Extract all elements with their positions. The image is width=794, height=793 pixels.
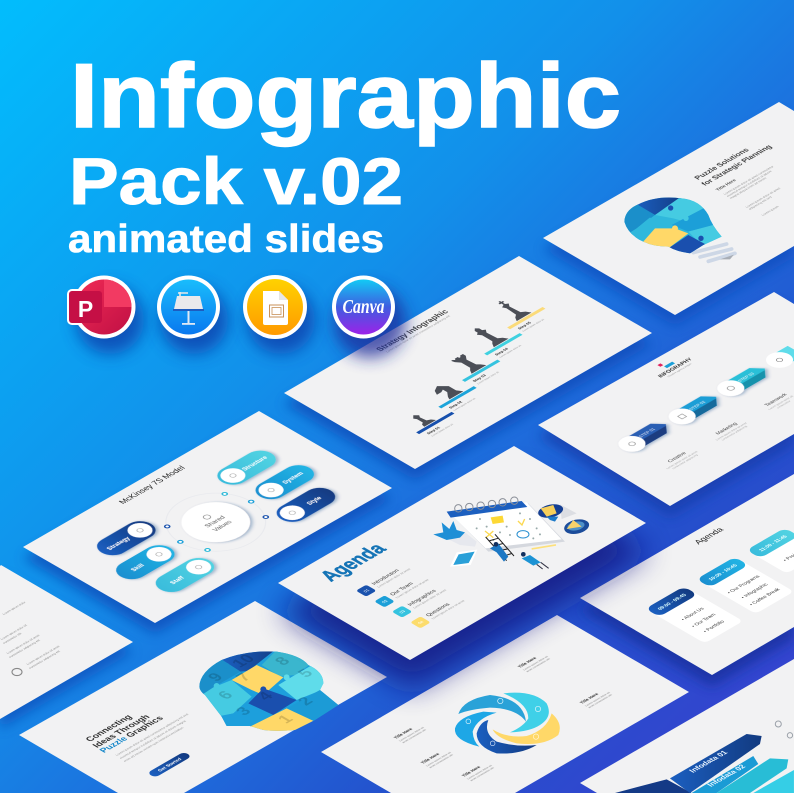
- body text: Lorem ipsum dolor sit amet consectetur adipiscing elit sed: [114, 713, 190, 757]
- pill: strategy: [91, 517, 162, 559]
- subheading and body: [715, 165, 782, 217]
- step 5 with king: Lorem ipsum dolor sit: [521, 318, 545, 332]
- caption: bottom: [461, 761, 496, 782]
- pill: system: System: [282, 472, 306, 485]
- step 3 with rook: Lorem ipsum dolor sit: [476, 371, 500, 385]
- column 1: • Portfolio: [702, 620, 726, 634]
- caption: teamwork: [762, 392, 794, 412]
- heading: connecting ideas: Connecting: [83, 713, 134, 743]
- agenda item 4: 04: [416, 620, 425, 625]
- step 1 with pawn: [400, 402, 464, 440]
- step 5 with king: [481, 292, 555, 335]
- swirl chart: [455, 693, 560, 754]
- icon: Canva: Canva: [342, 296, 384, 318]
- pill: skill: [110, 541, 181, 583]
- icon: Canva: [332, 276, 406, 358]
- caption: bottom: Lorem ipsum dolor sit: [466, 764, 493, 780]
- agenda item 4: Questions: [425, 602, 452, 618]
- puzzle numbers: 5: [294, 666, 317, 680]
- caption: marketing: Marketing: [715, 422, 739, 436]
- puzzle numbers: [204, 652, 317, 726]
- column 1: • About Us: [680, 606, 706, 622]
- step 1 with pawn: Lorem ipsum dolor sit: [430, 423, 455, 437]
- step 2: STEP 02: [688, 400, 707, 411]
- icon: PowerPoint: [67, 276, 144, 354]
- caption: left: [393, 723, 428, 744]
- icon: Google Slides: [243, 275, 315, 354]
- step 4: [760, 345, 794, 371]
- column 1: • Our Team: [690, 613, 718, 629]
- slide: left partial list: [0, 565, 133, 729]
- agenda item 1: [356, 564, 412, 597]
- slide: puzzle light bulb: [543, 102, 794, 326]
- subheading: Lorem ipsum dolor sit amet consectetur adipiscing elit: [385, 315, 451, 353]
- list text rows: consectetur adipiscing elit: [27, 650, 61, 670]
- step 2: [663, 391, 726, 428]
- column 2: • Coffee Break: [748, 587, 782, 607]
- list text rows: [0, 601, 61, 670]
- tagline: animated slides: animated slides: [68, 218, 384, 261]
- agenda item 1: Introduction: [371, 569, 401, 586]
- caption: lower left: [420, 748, 455, 769]
- slide: head puzzle: [19, 601, 387, 793]
- caption: bottom: amet consectetur elit: [469, 766, 495, 782]
- step 3: [712, 363, 774, 399]
- column 2: • Infographic: [740, 582, 770, 600]
- subtitle: Pack v.02: Pack v.02: [69, 144, 403, 218]
- step 3: STEP 03: [736, 371, 756, 383]
- center: shared values: Values: [211, 520, 234, 533]
- body text: enim ad minim veniam quis nostrud exercitation: [122, 726, 185, 763]
- pill: staff: Staff: [170, 576, 186, 586]
- pill: staff: [149, 554, 221, 596]
- ring connector dots: [157, 488, 275, 556]
- step 4 with queen: Lorem ipsum dolor sit: [498, 344, 523, 358]
- step 4 with queen: Step 04: [494, 347, 510, 356]
- list text rows: Lorem ipsum dolor sit amet: [25, 645, 61, 666]
- caption: left: amet consectetur elit: [401, 728, 427, 744]
- subheading and body: Lorem ipsum dolor sit amet: [744, 187, 782, 209]
- logo: [648, 352, 697, 380]
- illustration: calendar with people: [433, 497, 590, 569]
- puzzle numbers: 3: [232, 704, 255, 718]
- caption: teamwork: consectetur: [775, 400, 792, 409]
- caption: marketing: consectetur adipiscing: [720, 425, 749, 441]
- caption: creative: consectetur adipiscing: [671, 453, 699, 470]
- column 3: 11:00 - 11:45: [758, 534, 789, 553]
- step 2 with knight: Lorem ipsum dolor sit: [452, 397, 477, 411]
- puzzle numbers: 10: [228, 652, 259, 670]
- list text rows: consectetur elit: [1, 632, 23, 645]
- heading: agenda: Agenda: [315, 540, 391, 585]
- agenda item 2: Our Team: [389, 581, 416, 597]
- agenda item 2: Lorem ipsum dolor sit amet: [394, 578, 430, 599]
- list text rows: Lorem ipsum dolor: [1, 601, 27, 616]
- agenda item 2: [374, 575, 430, 607]
- list text rows: Lorem ipsum dolor sit: [0, 624, 28, 641]
- agenda item 2: 02: [380, 599, 389, 604]
- step 5 with king: Step 05: [517, 321, 533, 330]
- pill: style: Style: [306, 496, 324, 506]
- pill: system: [249, 461, 320, 503]
- puzzle numbers: 7: [232, 670, 255, 684]
- list text rows: consectetur adipiscing elit: [7, 639, 41, 659]
- step 1 with pawn: Step 01: [426, 426, 442, 435]
- arrow label: Infodata 01: Infodata 01: [687, 749, 730, 774]
- step 4 with queen: [458, 318, 532, 361]
- heading: connecting ideas: Ideas Through: [90, 713, 152, 749]
- subheading and body: Lorem ipsum: [760, 205, 780, 217]
- column 3: [746, 528, 794, 574]
- caption: top: Title Here: [517, 656, 538, 669]
- caption: right: amet consectetur elit: [587, 693, 613, 709]
- caption: teamwork: Lorem ipsum dolor sit: [767, 395, 794, 411]
- button: get started: Get Started: [157, 757, 183, 772]
- agenda item 4: Lorem ipsum dolor sit amet: [430, 599, 466, 620]
- puzzle numbers: 8: [271, 654, 294, 668]
- heading: Strategy Infographic: [374, 308, 451, 353]
- caption: creative: Lorem ipsum dolor sit amet: [665, 450, 699, 470]
- logo: Creative agency slogan: [666, 362, 693, 378]
- puzzle numbers: 1: [274, 712, 297, 726]
- caption: top: amet consectetur elit: [525, 657, 551, 673]
- heading: agenda: Agenda: [692, 526, 726, 546]
- center: shared values: [167, 494, 264, 550]
- pill: structure: [211, 447, 282, 488]
- step 2 with knight: [420, 375, 486, 414]
- puzzle numbers: 6: [214, 688, 237, 702]
- puzzle numbers: 9: [204, 670, 227, 684]
- caption: bottom: Title Here: [461, 765, 482, 778]
- heading: McKinsey 7S Model: [117, 464, 187, 505]
- caption: marketing: Lorem ipsum dolor sit amet: [714, 422, 748, 441]
- icon: Keynote: [157, 276, 228, 354]
- agenda item 4: [410, 596, 466, 628]
- list text rows: Lorem ipsum dolor sit amet: [5, 634, 41, 655]
- agenda item 3: [392, 585, 448, 618]
- caption: creative: [660, 447, 702, 471]
- pill: strategy: Strategy: [106, 536, 133, 551]
- subheading and body: eiusmod tempor incididunt ut labore: [725, 170, 773, 198]
- agenda item 3: Infographics: [407, 589, 438, 607]
- head puzzle graphic: [199, 651, 338, 731]
- body text: eiusmod tempor incididunt ut labore et dolore magna: [118, 720, 187, 760]
- caption: lower left: amet consectetur elit: [428, 753, 454, 769]
- puzzle numbers: 4: [254, 689, 277, 703]
- title: Infographic: Infographic: [70, 46, 621, 147]
- icon: PowerPoint: P: [78, 296, 93, 322]
- puzzle numbers: 2: [294, 694, 317, 708]
- step 1: STEP 01: [637, 427, 657, 438]
- slide: swirl diagram: [321, 615, 689, 793]
- pill: structure: Structure: [242, 455, 270, 472]
- caption: right: Title Here: [579, 692, 600, 705]
- heading: connecting ideas: Puzzle Graphics: [97, 714, 166, 754]
- arrow label: Infodata 02: Infodata 02: [705, 763, 748, 788]
- caption: lower left: Lorem ipsum dolor sit: [425, 751, 452, 767]
- caption: right: Lorem ipsum dolor sit: [584, 691, 611, 707]
- heading: puzzle solutions: Puzzle Solutions: [692, 147, 751, 181]
- pill: style: [270, 484, 342, 526]
- agenda item 1: Lorem ipsum dolor sit amet: [376, 568, 412, 588]
- light bulb puzzle: [620, 193, 735, 261]
- subheading and body: Title Here: [715, 178, 738, 192]
- slide: agenda with calendar: [278, 446, 648, 688]
- agenda item 1: 01: [362, 588, 371, 593]
- pill: skill: Skill: [130, 563, 146, 572]
- subheading and body: Lorem ipsum dolor sit amet consectetur: [722, 165, 776, 196]
- column 2: 10:00 - 10:45: [708, 563, 739, 582]
- ring: [145, 481, 286, 563]
- subheading and body: adipiscing elit sed: [747, 196, 773, 211]
- column 2: • Our Programs: [726, 574, 762, 595]
- caption: top: Lorem ipsum dolor sit: [522, 655, 549, 671]
- step 2 with knight: Step 02: [448, 401, 463, 409]
- button: get started: [147, 752, 192, 778]
- slide: process steps: [538, 292, 794, 517]
- caption: creative: Creative: [667, 451, 688, 464]
- caption: top: [517, 652, 552, 673]
- caption: left: Lorem ipsum dolor sit: [398, 726, 425, 742]
- center: shared values: Shared: [203, 515, 228, 529]
- heading: puzzle solutions: for Strategic Planning: [699, 143, 774, 187]
- column 2: [696, 557, 794, 614]
- step 1: [613, 419, 675, 455]
- step 3 with rook: [440, 347, 510, 388]
- slide: bottom right arrows: [580, 659, 794, 793]
- caption: lower left: Title Here: [420, 752, 441, 765]
- stacked arrows infographic: [615, 721, 794, 793]
- agenda item 3: 03: [398, 609, 407, 614]
- caption: teamwork: Teamwork: [764, 393, 789, 407]
- column 1: [645, 586, 743, 643]
- slide: McKinsey 7S model: [23, 411, 392, 634]
- agenda item 3: Lorem ipsum dolor sit amet: [412, 589, 447, 609]
- caption: left: Title Here: [393, 727, 414, 740]
- column 1: 09:00 - 09:45: [657, 593, 688, 611]
- caption: marketing: [709, 418, 751, 443]
- slide: agenda timetable: [580, 474, 794, 687]
- subheading and body: magna aliqua enim ad minim: [728, 177, 768, 200]
- icon: clock: [12, 668, 22, 676]
- slide: strategy infographic: [284, 256, 652, 480]
- logo: INFOGRAPHY: [657, 357, 694, 379]
- caption: right: [579, 688, 614, 709]
- step 3 with rook: Step 03: [472, 374, 487, 383]
